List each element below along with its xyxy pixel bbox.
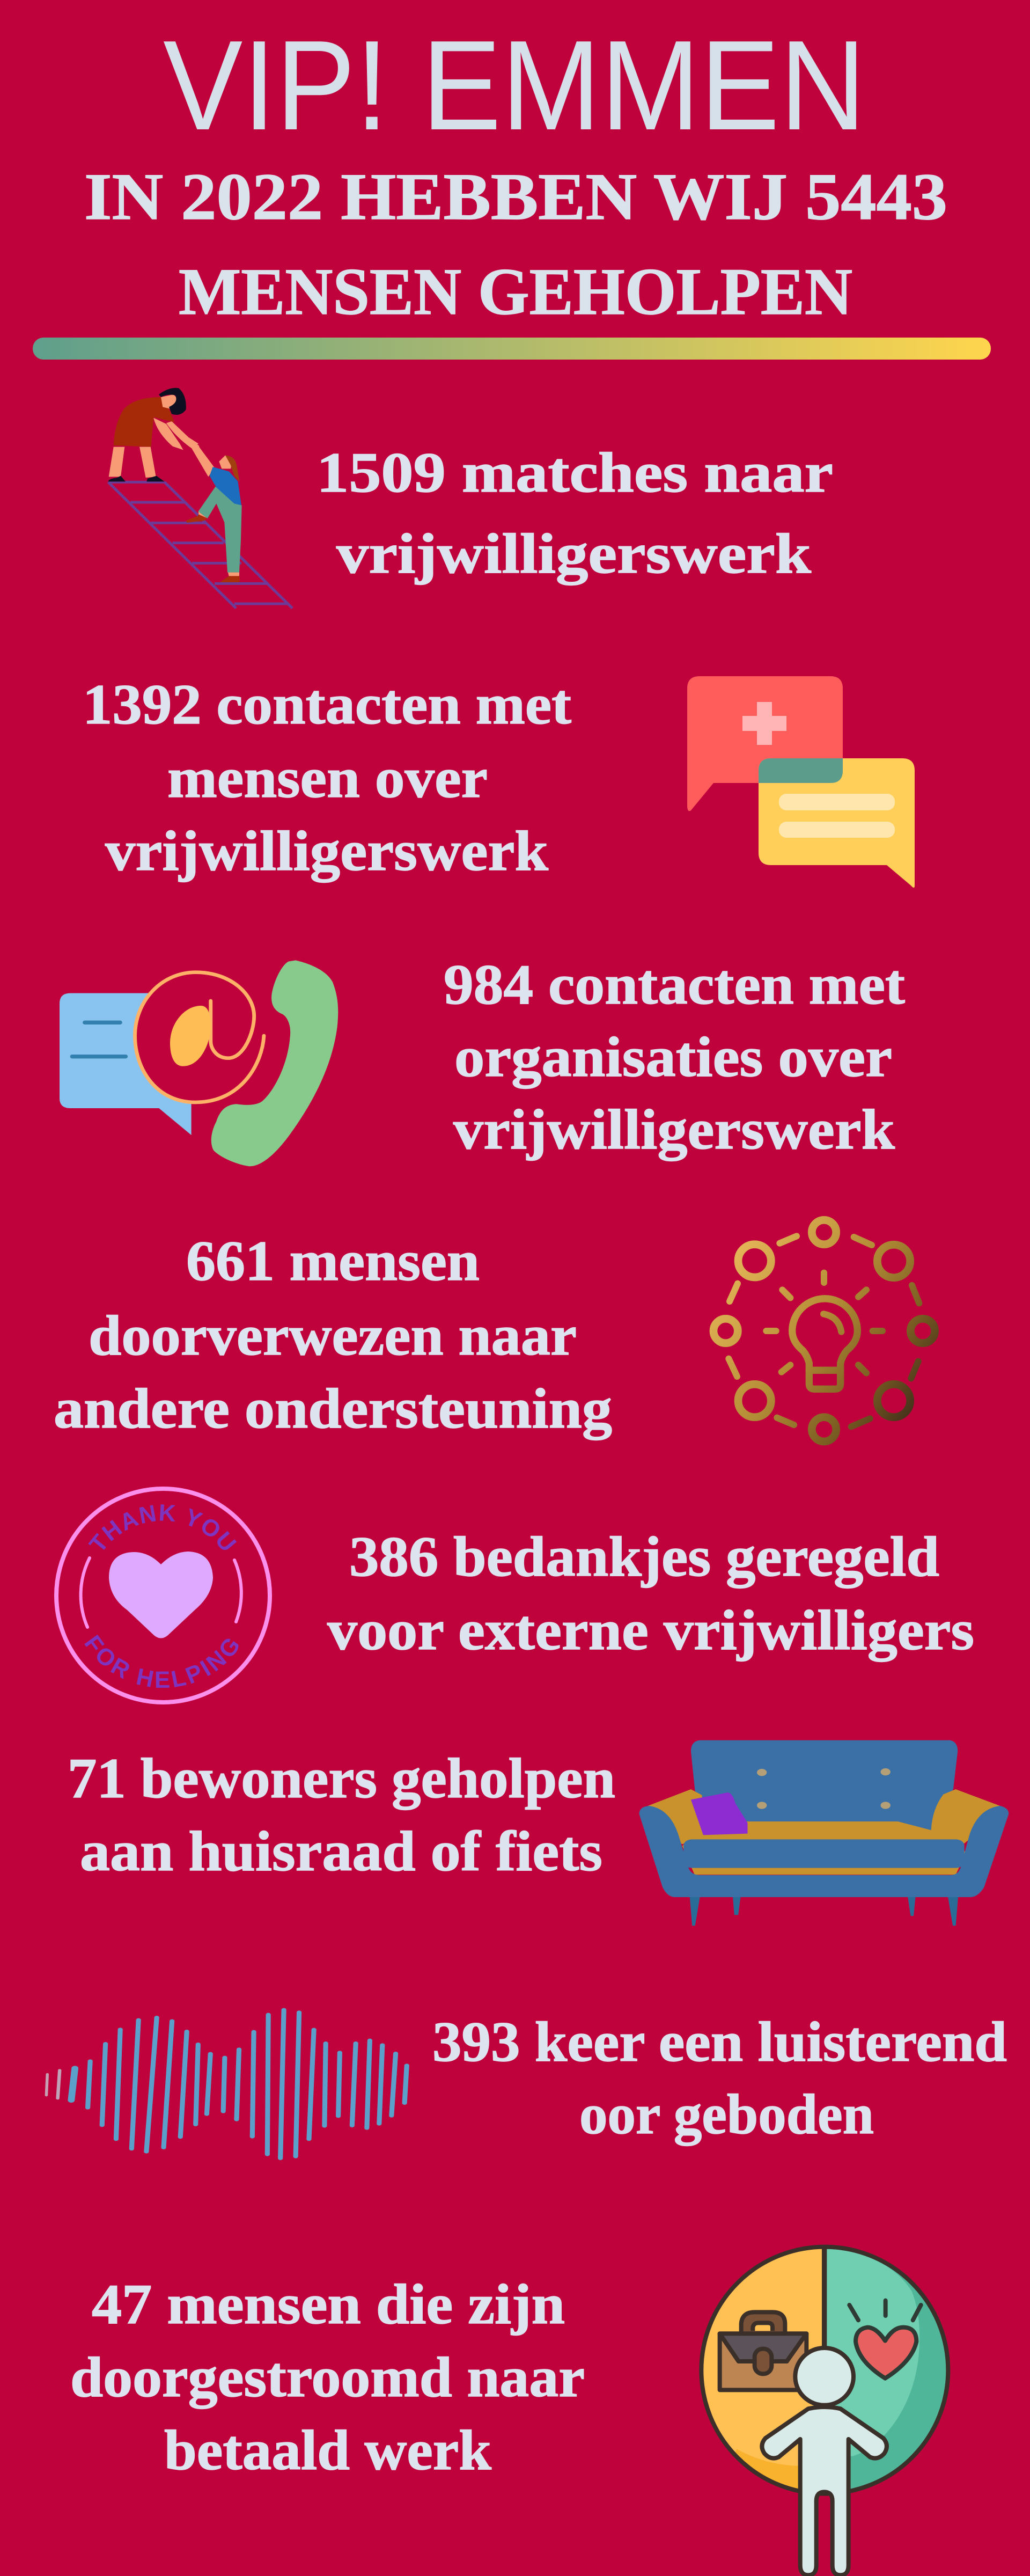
legs xyxy=(690,1896,958,1926)
icon: person with work and heart xyxy=(697,2243,953,2575)
circle halves xyxy=(697,2243,953,2497)
heart xyxy=(109,1552,213,1638)
pillow xyxy=(691,1792,748,1835)
seat xyxy=(682,1821,966,1875)
text: 71 bewoners: 71 bewoners geholpen xyxy=(68,1747,615,1810)
overlap xyxy=(759,758,843,783)
text: 661 mensen: 661 mensen xyxy=(186,1230,480,1292)
text: 386 bedankjes xyxy=(327,1525,974,1662)
side arcs xyxy=(81,1558,241,1627)
tufts xyxy=(757,1768,891,1809)
red bubble xyxy=(687,676,843,811)
badge text: THANK YOU xyxy=(88,1504,237,1550)
text: 71 bewoners: aan huisraad of fiets xyxy=(80,1820,602,1883)
person body xyxy=(762,2407,887,2575)
icon: sound wave xyxy=(46,2010,407,2158)
icon: lightbulb network xyxy=(713,1220,935,1441)
heart with rays xyxy=(849,2301,921,2379)
icon: sofa xyxy=(639,1740,1009,1926)
arms and base xyxy=(639,1806,1009,1897)
text: 393 keer xyxy=(432,2010,1007,2146)
icon: message, at sign and phone xyxy=(60,960,338,1166)
badge text xyxy=(84,1504,238,1688)
woman standing xyxy=(108,388,198,481)
text: 47 mensen: 47 mensen die zijn xyxy=(92,2273,565,2336)
icon: thank you badge xyxy=(54,1487,272,1704)
title: VIP! EMMEN xyxy=(163,14,866,157)
climbing person xyxy=(186,444,242,582)
text: 393 keer: oor geboden xyxy=(579,2083,874,2146)
text: 661 mensen: doorverwezen naar xyxy=(89,1304,577,1367)
phone xyxy=(211,960,338,1166)
text: 1392 contacten: 1392 contacten met xyxy=(83,673,571,736)
text: 1392 contacten xyxy=(83,673,571,882)
at sign xyxy=(135,972,255,1102)
text: 386 bedankjes: voor externe vrijwilligers xyxy=(327,1599,974,1662)
bulb xyxy=(792,1299,857,1389)
text: 1509 matches: vrijwilligerswerk xyxy=(336,522,811,585)
icon: helping hand on ladder xyxy=(108,388,292,608)
text: 47 mensen xyxy=(70,2273,585,2482)
text: 984 contacten: 984 contacten met xyxy=(444,953,905,1016)
backrest xyxy=(691,1740,958,1830)
briefcase xyxy=(720,2312,806,2390)
person head xyxy=(795,2348,854,2405)
inner dashes xyxy=(766,1273,882,1373)
text: 1509 matches xyxy=(317,441,833,585)
circles xyxy=(713,1220,935,1441)
text: 1392 contacten: vrijwilligerswerk xyxy=(105,819,548,882)
text: 984 contacten: vrijwilligerswerk xyxy=(453,1098,895,1161)
plus xyxy=(742,702,786,745)
text: 393 keer: 393 keer een luisterend xyxy=(432,2010,1007,2073)
outer dashes xyxy=(729,1236,919,1426)
text: 386 bedankjes: 386 bedankjes geregeld xyxy=(349,1525,939,1588)
subtitle xyxy=(84,160,947,328)
subtitle: IN 2022 HEBBEN WIJ 5443 xyxy=(84,160,947,233)
yellow arm insides xyxy=(648,1789,1000,1845)
text: 1509 matches: 1509 matches naar xyxy=(317,441,833,504)
text: 661 mensen xyxy=(54,1230,612,1440)
badge text: FOR HELPING xyxy=(84,1635,238,1688)
gradient divider bar xyxy=(33,338,991,360)
icon: chat bubbles xyxy=(687,676,915,888)
text: 47 mensen: doorgestroomd naar xyxy=(70,2346,585,2409)
speech bubble xyxy=(60,993,192,1135)
outer ring xyxy=(56,1489,270,1702)
message lines xyxy=(779,794,895,838)
text: 71 bewoners xyxy=(68,1747,615,1883)
yellow bubble xyxy=(759,758,915,888)
cushion xyxy=(683,1839,965,1868)
subtitle: MENSEN GEHOLPEN xyxy=(179,255,852,328)
text: 47 mensen: betaald werk xyxy=(164,2419,491,2482)
ladder xyxy=(108,482,292,608)
text: 984 contacten xyxy=(444,953,905,1161)
text: 661 mensen: andere ondersteuning xyxy=(54,1377,612,1440)
text: 984 contacten: organisaties over xyxy=(454,1026,892,1088)
text: 1392 contacten: mensen over xyxy=(167,747,488,809)
